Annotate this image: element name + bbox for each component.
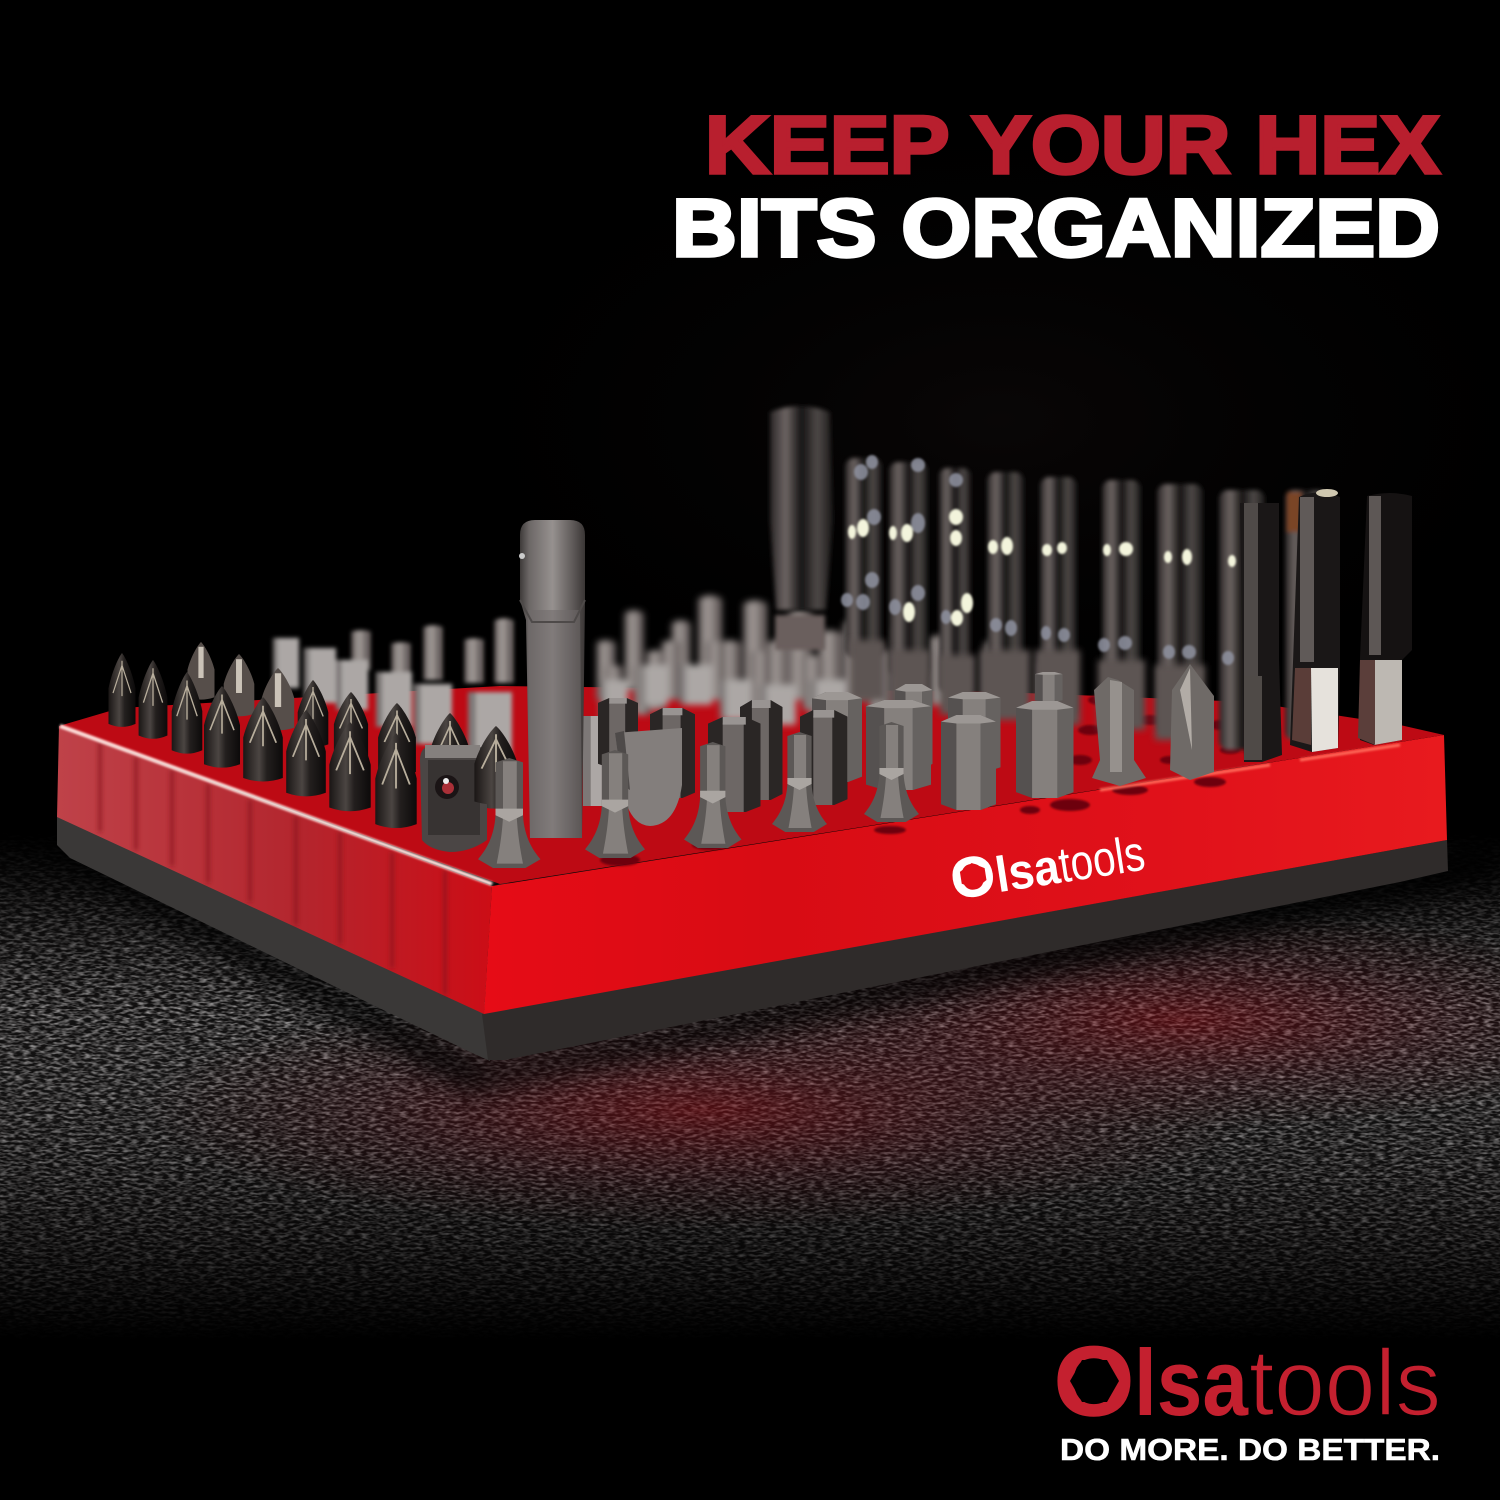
dark tall bit <box>1240 503 1282 762</box>
tray front face <box>484 735 1447 1014</box>
logo O with hexagon counter: O <box>1054 1326 1134 1436</box>
tray top surface <box>59 686 1444 884</box>
headline line 1: KEEP YOUR HEX <box>705 100 1440 191</box>
brand logo <box>1054 1326 1441 1467</box>
hex adapter bit <box>519 520 585 838</box>
tall bit shafts <box>845 458 1327 750</box>
tray face ribs <box>100 742 445 995</box>
silver tall bit with white base <box>1290 489 1340 752</box>
tray: red organizer with magnetic base <box>57 686 1448 1061</box>
tray socket holes <box>600 695 1240 866</box>
tray left face <box>57 726 492 1014</box>
blurred rear bits field <box>596 595 1065 725</box>
front row hex bits <box>478 701 1074 868</box>
tray base: left side <box>57 815 490 1061</box>
textured floor <box>0 820 1500 1340</box>
headline <box>672 100 1440 274</box>
right tall hex bits <box>1240 489 1412 762</box>
logo on tray: O <box>946 842 999 911</box>
square drive socket adapter <box>420 745 487 852</box>
tall blurred bits in rear row <box>770 406 1332 750</box>
left rear flat bits <box>273 618 556 757</box>
headline line 2: BITS ORGANIZED <box>672 183 1440 274</box>
phillips bits: front row <box>108 653 417 828</box>
bokeh highlights on shafts <box>841 455 1332 665</box>
mid rows: hex bits and flat blades <box>583 672 1062 826</box>
logo tools: tools <box>1249 1330 1441 1435</box>
tray base: front side <box>482 840 1448 1060</box>
logo lsa: lsa <box>1134 1330 1249 1435</box>
tray front edge highlight <box>1100 745 1400 790</box>
logo on tray: tools <box>1055 825 1148 893</box>
flat blade bit <box>615 728 682 826</box>
lower shaft section <box>850 640 1205 740</box>
phillips bits: rear row <box>188 642 517 809</box>
logo on tray <box>946 819 1149 911</box>
socket extension <box>770 406 833 650</box>
tagline: DO MORE. DO BETTER. <box>1060 1432 1440 1467</box>
tray edge highlight <box>60 726 492 884</box>
dark phillips bit near adapter <box>474 726 518 805</box>
black tall bit with silver base <box>1358 493 1412 745</box>
right front phillips-style bits <box>1092 664 1214 786</box>
logo on tray: lsa <box>992 838 1064 903</box>
